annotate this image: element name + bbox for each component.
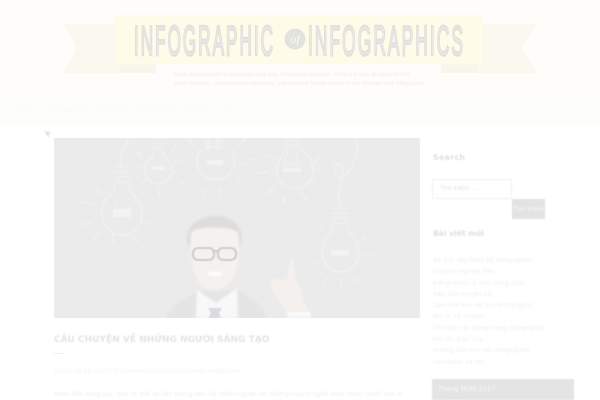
- bulb 4: [258, 138, 320, 203]
- logo banner: of: [290, 32, 301, 46]
- heading: search: Search: [433, 153, 465, 162]
- article title: CÂU CHUYỆN VỀ NHỮNG NGƯỜI SÁNG TẠO: [54, 335, 270, 345]
- shirt: [196, 288, 238, 318]
- logo tagline: Data visualization is a popular new way of sharing research. Here is a look at some of the: [174, 72, 410, 78]
- bulb 5: [307, 138, 374, 287]
- recent posts list: hút thị giác của: [433, 335, 483, 343]
- search button: Tìm kiếm: [514, 205, 543, 213]
- glasses: [193, 248, 236, 260]
- recent posts list: Infographic là một công thức: [433, 279, 525, 287]
- recent posts list: chuyên nghiệp hơn: [433, 267, 494, 275]
- face: [190, 228, 239, 290]
- recent posts list: Facebook xã hội: [433, 358, 485, 366]
- bulb 3: [188, 138, 254, 197]
- recent posts list: Tổ chức nội dung trong infographic: [433, 324, 545, 332]
- light bulb doodles: [81, 138, 374, 287]
- archive dropdown: [432, 379, 574, 400]
- recent posts list: Bộ sưu tập thiết kế Infographic: [433, 256, 532, 264]
- hair: [187, 216, 242, 246]
- title underline: [54, 353, 65, 354]
- archive dropdown: Tháng Mười 2017: [438, 385, 495, 393]
- search input: Tìm kiếm ...: [440, 184, 478, 192]
- sidebar divider: [421, 140, 422, 316]
- ear: [186, 250, 192, 262]
- recent posts list: hấp dẫn truyền tải: [433, 290, 492, 298]
- recent posts list: Làm thế nào để tạo Infographic: [433, 301, 534, 309]
- featured image: man with light bulbs: [54, 138, 420, 318]
- recent posts list: [433, 256, 545, 366]
- article excerpt: Nhắc đến sáng tạo, bạn có thể sẽ liên tưởng đến rất nhiều người với những ngành nghề khác nhau: thiết họa sĩ: [54, 391, 402, 398]
- logo tagline: most obvious, informational elements, and general trends found in the masses that infographic: [174, 81, 425, 87]
- recent posts list: thú vị và chuyên: [433, 312, 486, 320]
- article meta: Tháng 10 24, 2017 | 0 Comments | Inspiration/Ideas, Infographic: [54, 369, 242, 375]
- tie: [208, 308, 222, 318]
- bulb 2: [135, 138, 186, 197]
- jacket: [165, 290, 268, 318]
- smile: [207, 272, 223, 276]
- hand pointing: [271, 258, 311, 318]
- logo tagline: [174, 72, 425, 87]
- heading: recent posts: Bài viết mới: [433, 229, 484, 238]
- site header: [0, 0, 600, 126]
- logo banner: [64, 15, 536, 73]
- search input: [432, 179, 512, 199]
- logo title: INFOGRAPHIC: [134, 17, 275, 64]
- navigation menu: Home Infographics Marketing Technology Lifestyle Blog: [16, 105, 236, 113]
- small icon: cursor mark: [44, 131, 50, 138]
- man: [165, 216, 268, 318]
- bulb 1: [81, 138, 150, 243]
- search button: [512, 199, 545, 219]
- recent posts list: Hướng dẫn chi tiết Infographic: [433, 346, 530, 354]
